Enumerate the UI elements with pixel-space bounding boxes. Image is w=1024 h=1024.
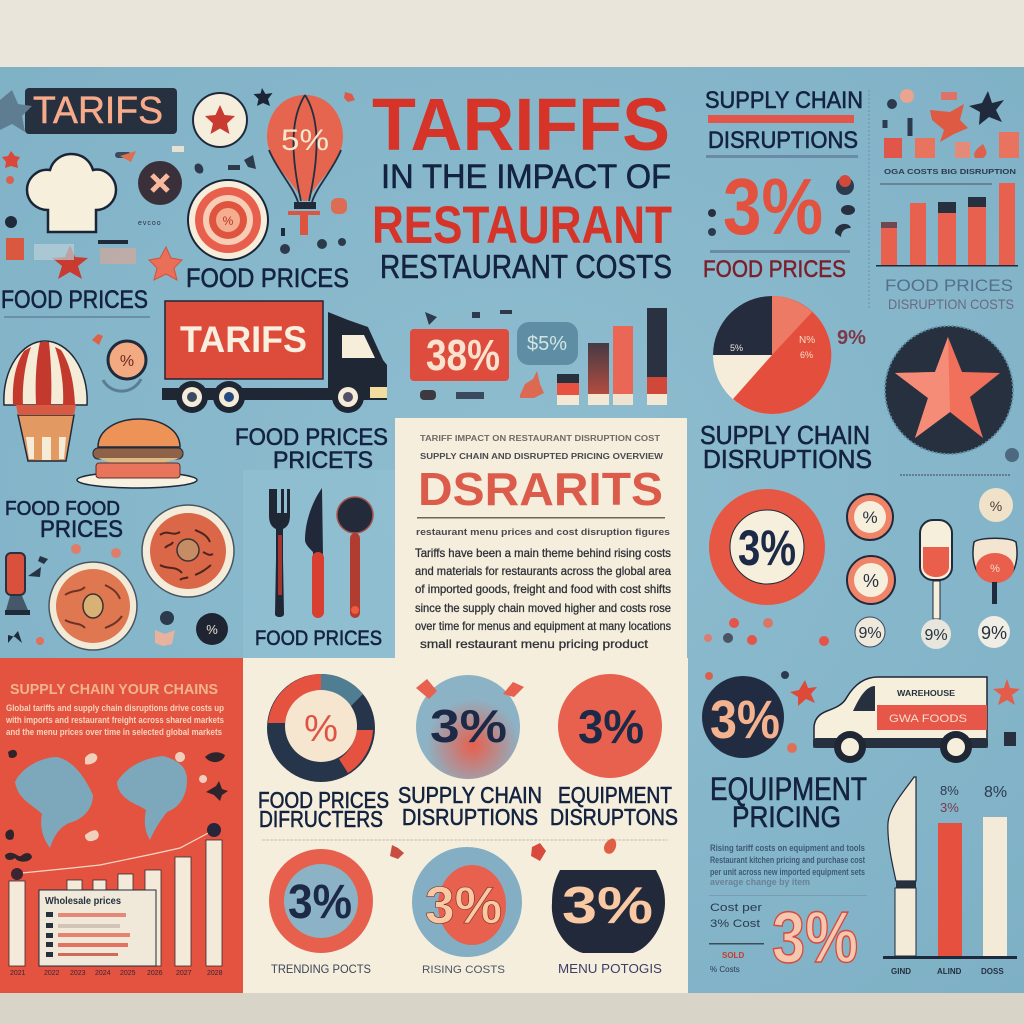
axis labels: 2024 <box>95 970 111 977</box>
circle stat: blue red 3% <box>412 843 546 957</box>
icon: striped balloon basket <box>4 341 87 461</box>
icon: van: GWA FOODS <box>889 713 967 725</box>
bar chart: cream bars <box>9 840 222 966</box>
icon: wine glasses <box>920 520 1017 619</box>
axis labels: 2027 <box>176 970 192 977</box>
panel: document disrarits: over time for menus and equipment at many locations <box>415 619 671 633</box>
pot shape stat: 3%: 3% <box>562 877 653 935</box>
title: IN THE IMPACT OF <box>381 158 671 196</box>
text block: equipment: Rising tariff costs on equipment and tools <box>710 843 865 853</box>
caption rule under left heading <box>4 316 150 318</box>
donut stat: 3%: 3% <box>738 520 796 576</box>
bar chart: knife and bars: GIND <box>891 967 911 976</box>
stat: 3% outline with note: Cost per <box>710 902 762 914</box>
panel: document disrarits: TARIFF IMPACT ON RESTAURANT DISRUPTION COST <box>420 434 660 443</box>
small percent tokens: 9% <box>924 627 948 644</box>
circle stat: blue 3%: 3% <box>430 700 507 752</box>
icon: x badge <box>138 161 182 205</box>
icon: delivery truck with tarifs: TARIFS <box>180 319 307 360</box>
labels: bottom row: RISING COSTS <box>422 964 505 976</box>
labels: mid row: DISRUPTONS <box>550 804 678 830</box>
icon: star on dark disk <box>885 326 1013 454</box>
bar chart: knife and bars: 8% <box>984 784 1007 801</box>
text block: equipment: per unit across new imported equipment sets <box>710 867 865 877</box>
panel: document disrarits: since the supply chain moved higher and costs rose <box>415 601 671 615</box>
panel: red supply chain: and the menu prices over time in selected global markets <box>6 727 222 737</box>
heading: food prices pricets: PRICETS <box>273 447 373 474</box>
panel: tarifs banner <box>0 88 177 134</box>
heading: supply chain disruptions mid <box>700 420 872 474</box>
title: RESTAURANT COSTS <box>380 248 672 285</box>
vertical dashed divider <box>868 90 870 310</box>
stat badge: 38%: $5% <box>527 333 567 355</box>
scatter icons <box>5 750 228 862</box>
icon: food plate left <box>49 562 137 650</box>
small percent tokens: 9% <box>981 623 1007 643</box>
small icons around 3% <box>708 175 855 253</box>
panel: document disrarits: DSRARITS <box>418 463 663 515</box>
small percent tokens <box>704 448 1019 649</box>
panel: red supply chain: with imports and restaurant freight across shared markets <box>5 715 224 725</box>
axis labels: 2023 <box>70 970 86 977</box>
icon: food plate right <box>142 505 234 597</box>
icon: percent badge: % <box>120 353 134 370</box>
labels: mid row <box>258 782 678 832</box>
heading: food prices pricets <box>235 424 388 474</box>
pie chart: 9% <box>837 327 866 349</box>
bar chart: title area <box>420 308 667 405</box>
panel: document disrarits: Tariffs have been a main theme behind rising costs <box>415 546 671 560</box>
icon: target plate <box>188 180 268 260</box>
donut stat: red ring 3%: 3% <box>288 876 352 929</box>
small percent badges: % <box>862 508 878 527</box>
decorative small red stars and icons: evcoo <box>138 220 162 227</box>
icon: hot air balloon 5%: 5% <box>281 124 329 157</box>
pie chart: 5% <box>730 343 743 353</box>
panel: red supply chain <box>0 658 243 993</box>
heading: supply chain disruptions top right: SUPPLY CHAIN <box>705 87 863 114</box>
stat: dark circle 3% <box>702 676 784 758</box>
circle stat: blue red 3%: 3% <box>425 877 502 935</box>
title <box>372 83 672 285</box>
stat: 3% outline with note: 3% Cost <box>710 918 760 930</box>
heading: food food prices: FOOD FOOD <box>5 498 120 520</box>
stat: 3% outline with note: 3% <box>772 898 858 978</box>
icon: percent badge <box>92 334 146 391</box>
pot shape stat: 3% <box>552 839 665 953</box>
text block: equipment: Restaurant kitchen pricing and purchase cost <box>710 855 865 865</box>
trend line <box>22 830 214 873</box>
heading: food prices pricets: FOOD PRICES <box>235 424 388 451</box>
stat: 3% red: 3% <box>723 162 823 251</box>
heading: food prices upper: FOOD PRICES <box>186 263 349 293</box>
stat badge: 38%: 38% <box>426 331 500 380</box>
heading: supply chain disruptions top right <box>705 87 863 158</box>
stat: 3% outline with note: % Costs <box>710 965 740 974</box>
heading: food prices left: FOOD PRICES <box>1 286 148 314</box>
panel: red supply chain: SUPPLY CHAIN YOUR CHAINS <box>10 681 218 698</box>
small percent badges: % <box>863 571 879 591</box>
pie chart <box>713 296 866 414</box>
labels: bottom row: MENU POTOGIS <box>558 961 662 976</box>
axis labels: 2022 <box>44 970 60 977</box>
heading: equipment pricing <box>710 771 867 834</box>
panel: document disrarits: small restaurant menu pricing product <box>420 637 649 651</box>
bar chart: knife and bars: 3% <box>940 800 959 815</box>
panel: cream metrics <box>243 658 688 993</box>
labels: mid row: DIFRUCTERS <box>259 806 383 832</box>
heading: equipment pricing: PRICING <box>732 801 841 834</box>
stat badge: 38% <box>410 322 578 381</box>
icon: chef hat <box>27 154 116 232</box>
heading: faded food price: DISRUPTION COSTS <box>888 296 1014 312</box>
heading: food prices red: FOOD PRICES <box>703 256 846 283</box>
bar chart: knife and bars <box>883 777 1017 976</box>
scattered icons top right: OGA COSTS BIG DISRUPTION <box>884 169 1016 176</box>
text block: equipment <box>710 843 865 887</box>
circle stat: red 3% <box>558 674 662 778</box>
scattered icons top right <box>880 89 1019 185</box>
axis labels: 2025 <box>120 970 136 977</box>
labels: bottom row: TRENDING POCTS <box>271 962 371 976</box>
small percent badges <box>847 494 895 604</box>
donut: food prices: % <box>304 708 338 750</box>
axis labels <box>10 970 223 977</box>
small percent tokens: % <box>990 498 1002 514</box>
heading: food prices below cutlery: FOOD PRICES <box>255 627 382 650</box>
icon: van <box>813 677 988 763</box>
icon: target plate: % <box>223 214 234 228</box>
text block: equipment: average change by item <box>710 877 810 887</box>
panel: document disrarits: of imported goods, freight and food with cost shifts <box>415 582 671 596</box>
heading: faded food price: FOOD PRICES <box>885 276 1013 295</box>
stat: dark circle 3%: 3% <box>710 690 780 750</box>
bar chart: knife and bars: ALIND <box>937 967 962 976</box>
panel: document disrarits: SUPPLY CHAIN AND DISRUPTED PRICING OVERVIEW <box>420 452 664 461</box>
small percent tokens: 9% <box>858 625 882 642</box>
labels: mid row: SUPPLY CHAIN <box>398 782 542 808</box>
icon: hot air balloon 5% <box>267 95 343 235</box>
donut stat: red ring 3% <box>269 845 404 953</box>
heading: equipment pricing: EQUIPMENT <box>710 771 867 807</box>
stat: 3% outline with note: SOLD <box>722 951 744 960</box>
panel: red supply chain: Wholesale prices <box>45 896 121 907</box>
divider: metrics row <box>262 839 668 841</box>
red stars near van <box>705 671 1020 753</box>
icon: cutlery <box>269 488 373 618</box>
panel: document disrarits: restaurant menu prices and cost disruption figures <box>416 527 670 537</box>
map: world left <box>15 757 93 848</box>
axis labels: 2028 <box>207 970 223 977</box>
panel: document disrarits <box>395 418 687 658</box>
circle stat: red 3%: 3% <box>578 700 644 753</box>
labels: mid row: DISRUPTIONS <box>402 804 538 830</box>
icon: star badge <box>193 88 272 147</box>
bar chart: red bars <box>876 183 1018 266</box>
table card <box>39 890 156 966</box>
title: TARIFFS <box>372 83 670 166</box>
decorative small red stars and icons <box>2 92 355 280</box>
bar chart: knife and bars: DOSS <box>981 967 1004 976</box>
axis labels: 2021 <box>10 970 26 977</box>
stat: 3% outline with note <box>709 895 867 978</box>
heading: food food prices <box>5 498 123 543</box>
title: RESTAURANT <box>372 196 672 255</box>
map: world right <box>117 756 187 840</box>
pie chart: 6% <box>800 350 813 360</box>
heading: supply chain disruptions mid: DISRUPTIONS <box>703 444 872 474</box>
panel: lighter cutlery panel <box>243 470 395 658</box>
panel: document disrarits: and materials for restaurants across the global area <box>415 564 671 578</box>
icon: black badge and pack <box>155 611 228 646</box>
heading: supply chain disruptions top right: DISRUPTIONS <box>708 127 858 154</box>
panel: red supply chain: Global tariffs and supply chain disruptions drive costs up <box>6 703 224 713</box>
icon: wine glasses: % <box>990 563 1000 575</box>
icon: burger <box>77 419 197 488</box>
icon: black badge and pack: % <box>206 622 218 637</box>
icon: blender and small items <box>5 544 121 645</box>
bar chart: knife and bars: 8% <box>940 783 959 798</box>
pie chart: N% <box>799 335 815 346</box>
panel: tarifs banner: TARIFS <box>33 90 163 132</box>
labels: mid row: FOOD PRICES <box>258 787 389 813</box>
heading: faded food price <box>885 276 1014 312</box>
donut: food prices <box>267 674 375 782</box>
labels: bottom row <box>271 961 662 976</box>
heading: supply chain disruptions mid: SUPPLY CHAIN <box>700 420 870 450</box>
icon: van: WAREHOUSE <box>897 689 956 698</box>
donut stat: 3% <box>709 489 825 605</box>
icon: delivery truck with tarifs <box>162 301 387 413</box>
heading: food food prices: PRICES <box>40 516 123 543</box>
labels: mid row: EQUIPMENT <box>558 782 672 808</box>
circle stat: blue 3% <box>416 675 524 779</box>
axis labels: 2026 <box>147 970 163 977</box>
